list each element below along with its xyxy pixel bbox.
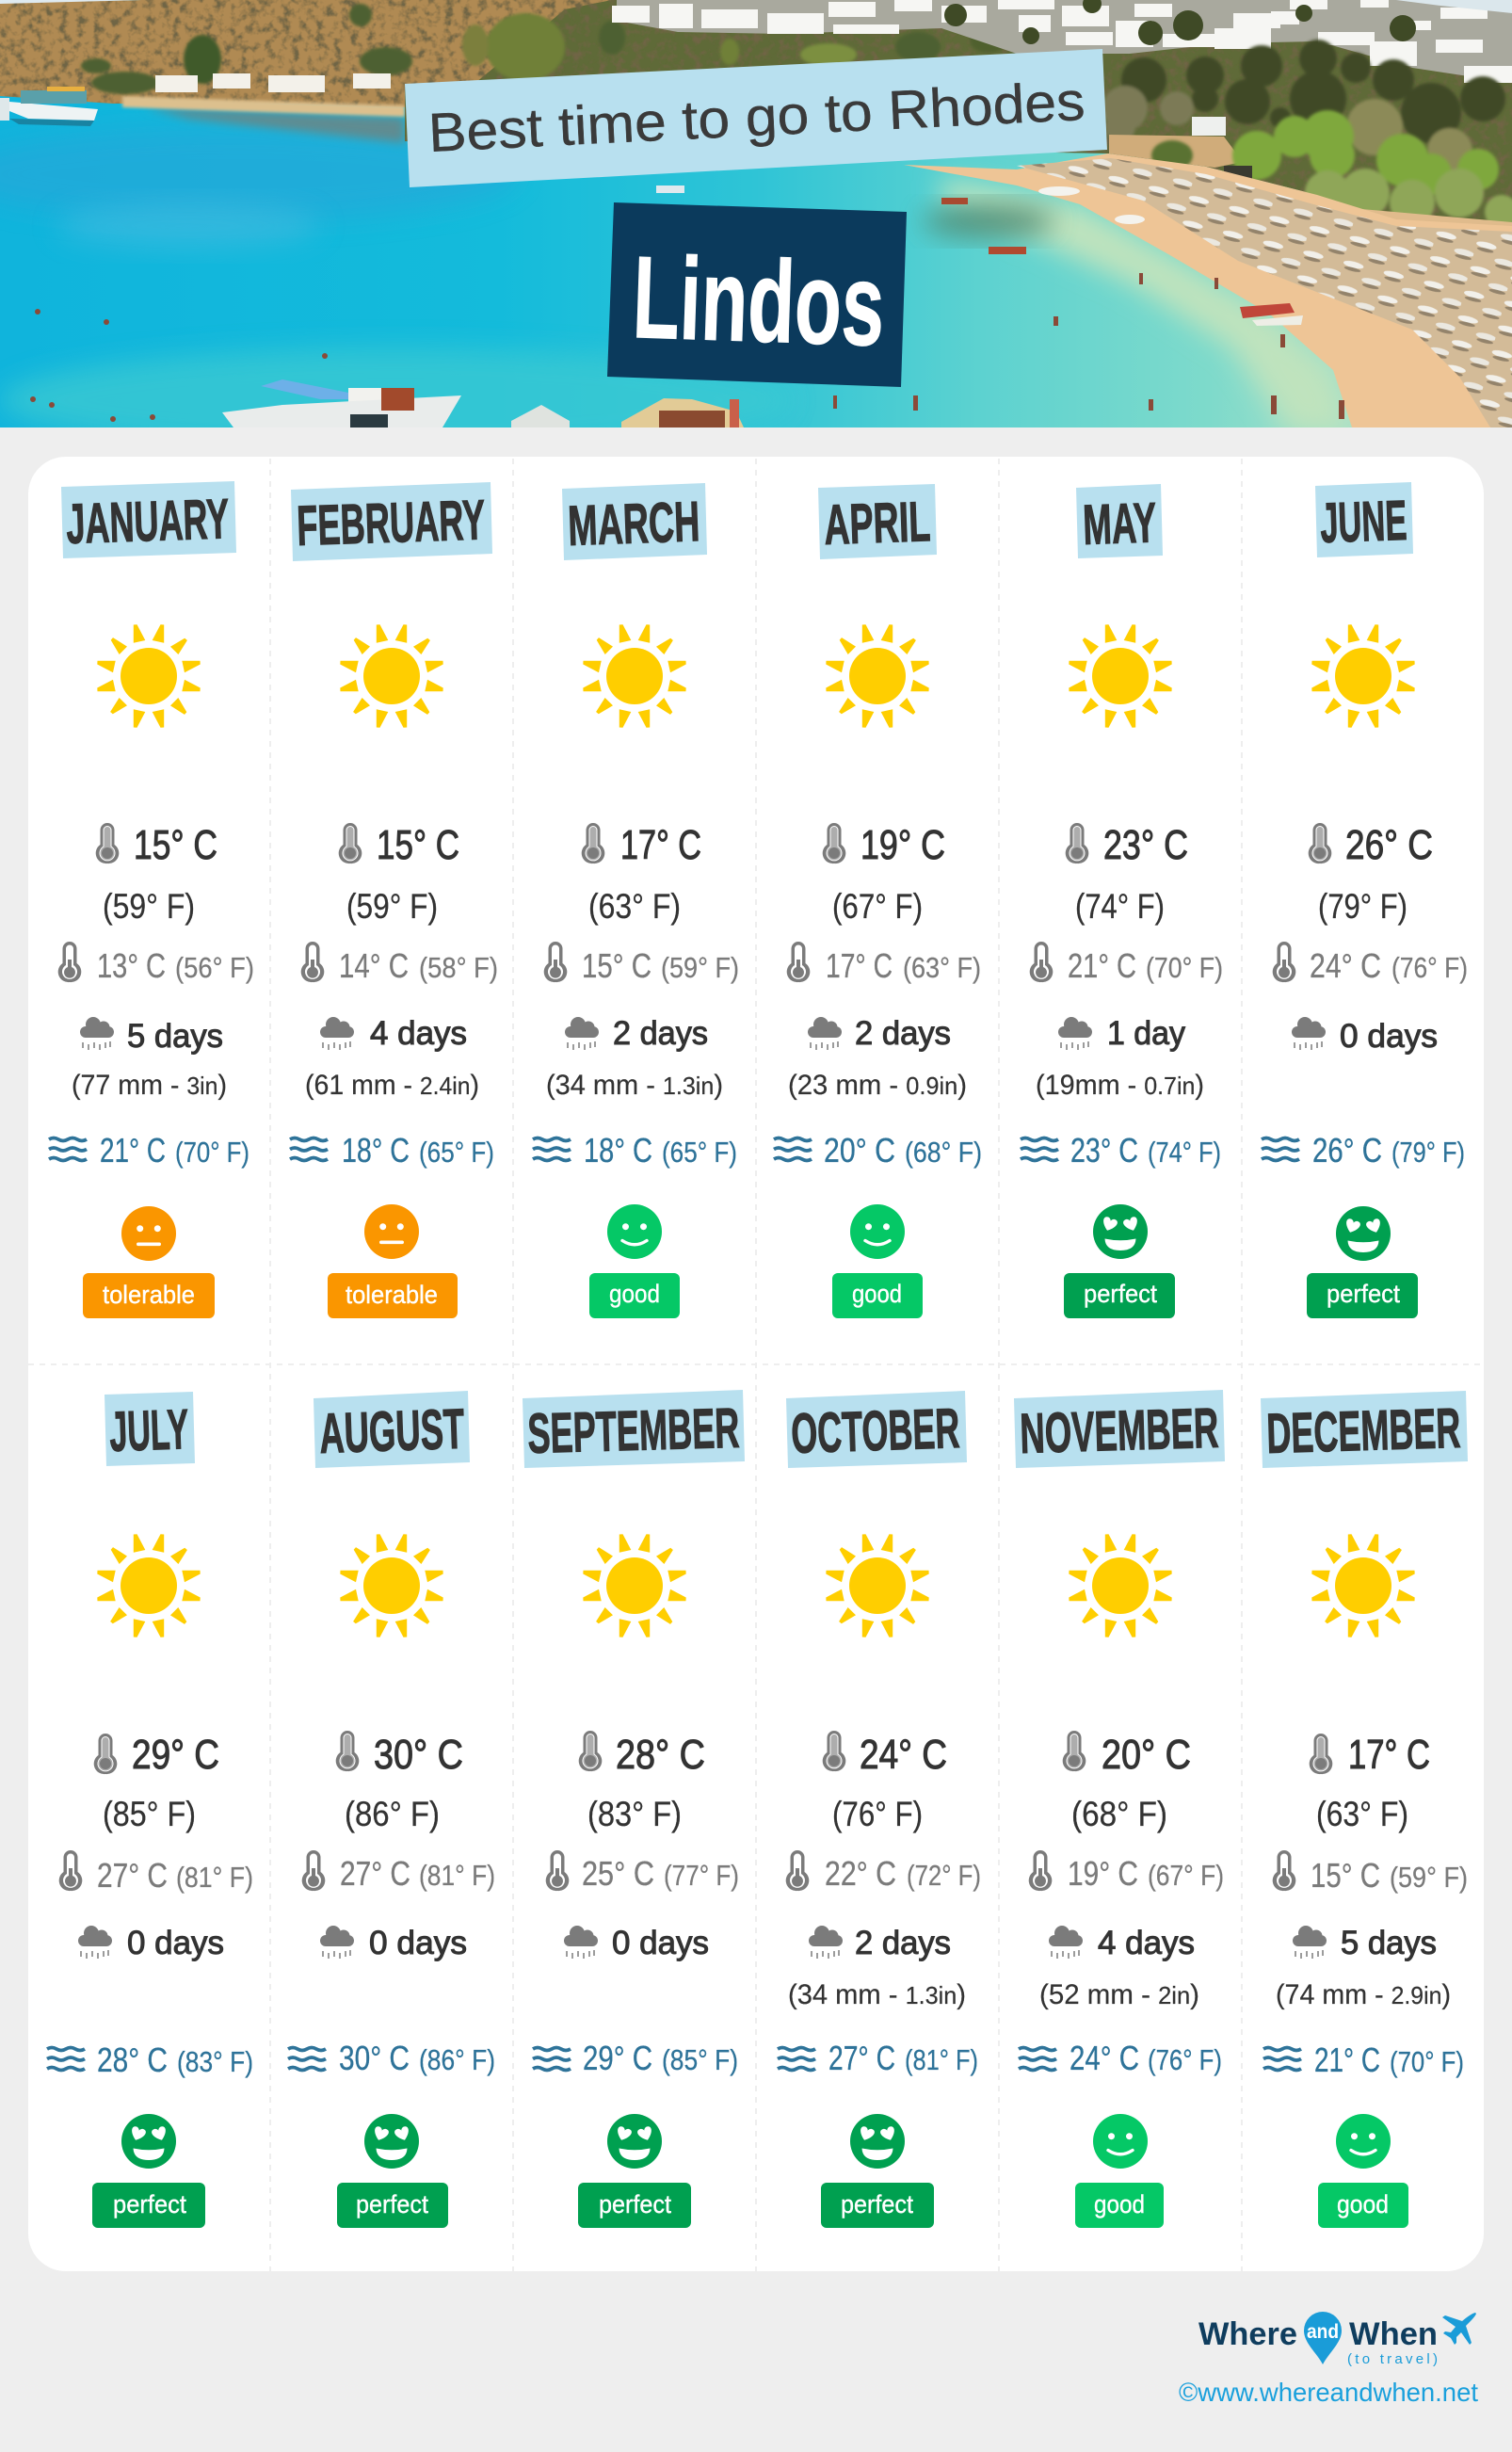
rating: good [1318,2114,1408,2228]
low temperature [786,1850,981,1893]
high temperature: 15° C [377,822,459,868]
March heading [562,483,707,560]
high temperature [1309,822,1433,926]
rainfall: 2 days [855,1925,951,1961]
rainfall: (77 mm - 3in) [72,1070,227,1101]
sea temperature: 28° C [97,2041,168,2079]
November heading: NOVEMBER [1019,1396,1219,1465]
sea temperature: (70° F) [1390,2045,1464,2078]
rating: good: good [852,1280,902,1308]
rating: tolerable: tolerable [346,1281,438,1309]
rating: good: good [609,1280,660,1308]
sea temperature: 20° C [824,1131,895,1170]
rainfall: 5 days [127,1018,223,1055]
low temperature: 14° C [339,946,409,985]
high temperature: 23° C [1103,822,1188,868]
high temperature: (63° F) [588,887,681,926]
title banner: Best time to go to Rhodes [426,71,1086,164]
low temperature: (81° F) [176,1861,253,1894]
rating: good [589,1204,680,1318]
high temperature [96,822,217,926]
boats in foreground [222,379,744,427]
low temperature: 22° C [825,1854,896,1893]
high temperature: 26° C [1345,822,1433,868]
rainfall: 2 days [855,1015,951,1052]
high temperature: 24° C [860,1732,947,1778]
sea temperature: (68° F) [905,1136,982,1169]
website credit: ©www.whereandwhen.net [1179,2378,1478,2407]
rainfall: 5 days [1341,1925,1437,1961]
icon: sun [97,1534,201,1637]
sea temperature: (65° F) [419,1136,494,1169]
high temperature: (79° F) [1318,887,1407,926]
sea temperature [47,2041,253,2079]
sea temperature: 23° C [1070,1131,1138,1170]
icon: sun [826,624,929,728]
high temperature: 28° C [616,1732,705,1778]
rainfall: (74 mm - 2.9in) [1276,1979,1451,2010]
July heading: JULY [108,1397,189,1463]
high temperature [823,1731,947,1833]
low temperature: 27° C [97,1856,168,1895]
rainfall: 0 days [369,1925,467,1961]
rating: perfect [821,2114,934,2228]
sea temperature: (76° F) [1148,2043,1222,2076]
low temperature [787,942,981,985]
low temperature [59,1850,253,1895]
low temperature: (81° F) [419,1859,495,1892]
rating: perfect: perfect [1327,1280,1400,1308]
rainfall: (52 mm - 2in) [1039,1979,1199,2010]
rating: perfect: perfect [599,2190,671,2218]
high temperature: 17° C [1348,1732,1430,1778]
May heading: MAY [1082,491,1157,557]
rainfall: (61 mm - 2.4in) [305,1070,479,1101]
month: December [1261,1391,1468,2228]
October heading: OCTOBER [790,1396,960,1465]
rainfall [1276,1925,1451,2010]
sea temperature: 29° C [583,2039,652,2077]
high temperature [336,1731,463,1833]
March heading: MARCH [567,490,700,557]
sea temperature: 30° C [339,2039,410,2077]
sea temperature: 18° C [342,1131,410,1170]
low temperature [302,1850,495,1893]
September heading: SEPTEMBER [526,1396,740,1465]
low temperature [544,942,739,985]
February heading [291,482,492,561]
October heading [786,1391,967,1468]
sea temperature: 26° C [1312,1131,1382,1170]
icon: sun [1069,1534,1172,1637]
month: November [1014,1390,1225,2228]
sea temperature: (65° F) [662,1136,737,1169]
sea temperature: (85° F) [662,2043,738,2076]
month: August [288,1391,495,2228]
high temperature: 19° C [861,822,945,868]
month: March [533,483,739,1318]
sea temperature [533,1131,737,1170]
low temperature: 21° C [1068,946,1136,985]
high temperature [823,822,945,926]
icon: sun [583,1534,686,1637]
high temperature [1063,1731,1191,1833]
high temperature [1310,1732,1430,1833]
icon: sun [340,1534,443,1637]
rating: tolerable: tolerable [103,1281,195,1309]
rainfall [72,1017,227,1101]
high temperature: 30° C [374,1732,463,1778]
high temperature: (59° F) [103,887,195,926]
April heading [818,484,937,559]
September heading [523,1390,745,1468]
destination label [607,202,907,387]
icon: sun [826,1534,929,1637]
high temperature: (76° F) [832,1795,923,1833]
rating: perfect [1064,1204,1175,1318]
high temperature: 20° C [1102,1732,1191,1778]
January heading [61,481,236,558]
header photo: Lindos bay [0,0,1512,452]
rainfall [788,1015,967,1101]
sea temperature [290,1131,494,1170]
sea temperature [1021,1131,1221,1170]
month: October [778,1391,981,2228]
low temperature: (76° F) [1391,951,1468,984]
high temperature [1066,822,1188,926]
July heading [105,1392,195,1466]
low temperature: (77° F) [664,1859,739,1892]
logo: Where and When: and [1307,2321,1339,2343]
low temperature: (72° F) [907,1859,981,1892]
rating: perfect: perfect [841,2190,913,2218]
high temperature: 29° C [132,1732,219,1778]
rating: tolerable [328,1204,458,1318]
low temperature: 19° C [1068,1854,1138,1893]
low temperature: 25° C [582,1854,654,1893]
sea temperature: (81° F) [905,2043,978,2076]
high temperature [339,822,459,926]
low temperature [1273,1850,1468,1895]
high temperature [579,1731,705,1833]
rainfall [546,1015,723,1101]
low temperature: (67° F) [1148,1859,1224,1892]
title banner [405,49,1107,187]
sea temperature: 27° C [828,2039,895,2077]
low temperature [1029,1850,1224,1893]
left hill vegetation [81,4,1007,94]
high temperature: (63° F) [1316,1795,1408,1833]
low temperature: (63° F) [903,951,981,984]
rainfall: (34 mm - 1.3in) [546,1070,723,1101]
rainfall [1036,1015,1204,1101]
icon: sun [1311,1534,1415,1637]
rating: perfect [337,2114,448,2228]
high temperature [582,822,701,926]
low temperature [58,942,254,985]
high temperature: (85° F) [103,1795,196,1833]
month: April [774,484,982,1318]
high temperature: (68° F) [1071,1795,1167,1833]
November heading [1014,1390,1225,1468]
rainfall: (34 mm - 1.3in) [788,1979,966,2010]
August heading [314,1391,470,1468]
low temperature [546,1850,739,1893]
rating: tolerable [83,1206,215,1318]
month: January [49,481,254,1318]
August heading: AUGUST [318,1397,465,1465]
rainfall [788,1925,966,2010]
June heading: JUNE [1319,489,1407,555]
February heading: FEBRUARY [296,488,486,557]
rainfall: 0 days [1340,1018,1438,1055]
sea temperature: 21° C [100,1131,166,1170]
high temperature: (74° F) [1075,887,1165,926]
logo: Where and When [1198,2312,1476,2367]
rainfall [564,1925,709,1961]
calendar panel [28,457,1484,2271]
destination label: Lindos [631,233,887,371]
high temperature: 17° C [620,822,701,868]
low temperature: (58° F) [419,951,498,984]
rating: perfect [92,2114,205,2228]
rainfall [320,1925,467,1961]
rainfall: (19mm - 0.7in) [1036,1070,1204,1101]
sea temperature [1263,2041,1464,2079]
sea temperature [288,2039,495,2077]
low temperature: 24° C [1310,946,1381,985]
month: July [47,1392,253,2228]
low temperature: 27° C [340,1854,410,1893]
low temperature: (56° F) [175,951,254,984]
sea temperature: (70° F) [175,1136,249,1169]
low temperature [1030,942,1223,985]
moored boat left [0,87,98,126]
low temperature: 13° C [97,946,166,985]
sea temperature: (74° F) [1148,1136,1221,1169]
sea temperature: 24° C [1070,2039,1139,2077]
May heading [1076,484,1163,558]
April heading: APRIL [823,490,931,557]
rating: good [832,1204,923,1318]
rating: good: good [1337,2190,1389,2218]
rainfall: 4 days [370,1015,467,1052]
low temperature: (59° F) [661,951,739,984]
sea temperature: 18° C [584,1131,652,1170]
sea temperature: (79° F) [1391,1136,1465,1169]
rating: good: good [1094,2190,1145,2218]
rating: perfect: perfect [1084,1280,1157,1308]
rating: good [1075,2114,1164,2228]
high temperature: (67° F) [832,887,923,926]
logo: Where and When: Where [1198,2316,1297,2352]
high temperature: (86° F) [345,1795,440,1833]
rainfall: 4 days [1098,1925,1195,1961]
rainfall [78,1925,224,1961]
rating: perfect [578,2114,691,2228]
low temperature [301,942,498,985]
low temperature: (59° F) [1390,1861,1468,1894]
rainfall [1039,1925,1199,2010]
rainfall [1292,1017,1438,1055]
month: February [290,482,498,1318]
high temperature: (59° F) [346,887,438,926]
high temperature: (83° F) [587,1795,682,1833]
rainfall: 1 day [1107,1015,1185,1052]
rating: perfect [1307,1206,1418,1318]
month: May [1021,484,1223,1318]
sea temperature [774,1131,982,1170]
sea temperature [49,1131,249,1170]
sea temperature [533,2039,738,2077]
low temperature: 15° C [582,946,651,985]
low temperature: 17° C [826,946,893,985]
sea temperature: 21° C [1314,2041,1380,2079]
month: September [523,1390,745,2228]
rainfall: 0 days [612,1925,709,1961]
rainfall: (23 mm - 0.9in) [788,1070,967,1101]
high temperature [94,1732,219,1833]
low temperature: 15° C [1311,1856,1380,1895]
sea temperature: (86° F) [419,2043,495,2076]
icon: sun [583,624,686,728]
rainfall: 0 days [127,1925,224,1961]
logo: Where and When: (to travel) [1347,2351,1438,2367]
logo: Where and When: When [1349,2316,1438,2352]
icon: sun [97,624,201,728]
icon: sun [340,624,443,728]
high temperature: 15° C [134,822,217,868]
sea temperature [1262,1131,1465,1170]
rainfall [305,1015,479,1101]
sea temperature [1019,2039,1222,2077]
low temperature [1273,942,1468,985]
olive groves [1102,40,1505,173]
sea temperature [778,2039,978,2077]
icon: sun [1311,624,1415,728]
rating: perfect: perfect [113,2190,186,2218]
rainfall: 2 days [613,1015,708,1052]
icon: sun [1069,624,1172,728]
rating: perfect: perfect [356,2190,428,2218]
January heading: JANUARY [65,487,230,556]
month: June [1262,482,1468,1318]
low temperature: (70° F) [1146,951,1223,984]
June heading [1315,482,1413,557]
sea temperature: (83° F) [177,2045,253,2078]
